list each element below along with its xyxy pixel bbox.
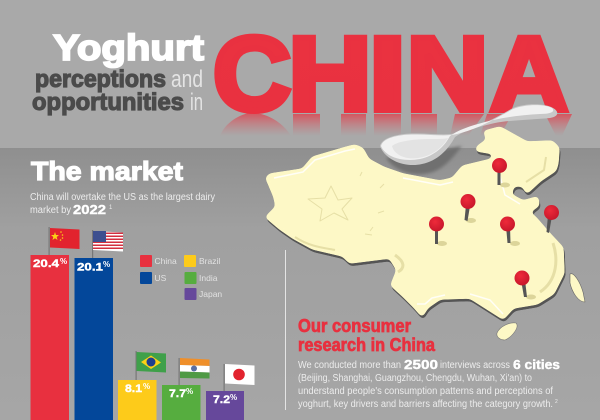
divider line <box>285 250 286 410</box>
research description text: yoghurt, key drivers and barriers affecting the category growth. <box>298 399 553 410</box>
background floor <box>0 148 600 420</box>
flag: US <box>92 230 123 258</box>
legend item: US: US <box>154 273 167 283</box>
intro text: China will overtake the US as the largest dairy <box>30 192 215 203</box>
heading: CHINA <box>213 15 568 133</box>
bar: China 20.4%: % <box>60 257 67 266</box>
bar: China 20.4% <box>30 255 69 420</box>
bar: Brazil 8.1%: % <box>143 382 150 391</box>
bar: US 20.1%: % <box>103 260 110 269</box>
map shadow <box>268 130 564 320</box>
legend item: India: India <box>199 273 218 283</box>
title: Yoghurt perceptions and opportunities in: perceptions <box>35 66 166 93</box>
reflection of CHINA lettering <box>220 113 572 136</box>
bar: India 7.7%: % <box>186 387 193 396</box>
heading: Our consumer research in China: research in China <box>298 335 436 355</box>
bar: India 7.7% <box>162 385 200 420</box>
research description text: 2 <box>555 399 558 405</box>
map embossed details <box>295 157 556 292</box>
flag: India <box>178 358 210 385</box>
intro text: 2022 <box>73 202 106 217</box>
heading: Our consumer research in China <box>298 316 436 355</box>
flag: China <box>48 227 80 255</box>
map highlights <box>274 149 520 314</box>
research description text <box>298 357 560 410</box>
title: Yoghurt perceptions and opportunities in: Yoghurt <box>53 27 204 68</box>
bar: Japan 7.2% <box>206 391 244 420</box>
spoon shadow <box>386 146 462 174</box>
map land <box>267 128 563 318</box>
map pins <box>429 158 559 300</box>
flag: Brazil <box>136 351 166 380</box>
title: Yoghurt perceptions and opportunities in <box>32 27 204 116</box>
heading: CHINA: I <box>369 15 406 132</box>
flag: Japan <box>224 364 254 391</box>
title: Yoghurt perceptions and opportunities in: in <box>190 89 203 116</box>
island: Taiwan <box>570 274 585 302</box>
legend item: Japan: Japan <box>199 289 222 299</box>
bar: Brazil 8.1%: 8.1 <box>125 383 142 395</box>
pin: Shanghai <box>544 205 559 233</box>
bar: China 20.4%: 20.4 <box>33 258 60 270</box>
pin: Chengdu <box>429 216 447 246</box>
pin: Wuhan <box>500 216 520 246</box>
title: Yoghurt perceptions and opportunities in: opportunities <box>32 89 184 116</box>
spoon <box>380 104 557 174</box>
heading: The market: The market <box>31 156 183 186</box>
heading: CHINA: C <box>213 15 291 133</box>
pin: Beijing <box>492 158 510 188</box>
map of China <box>267 128 585 340</box>
intro text: market by <box>30 205 71 216</box>
background wall <box>0 0 600 148</box>
heading: CHINA: A <box>490 15 568 133</box>
heading: CHINA: N <box>407 16 488 133</box>
bar: US 20.1%: 20.1 <box>77 262 103 274</box>
legend <box>140 255 222 300</box>
research description text: (Beijing, Shanghai, Guangzhou, Chengdu, Wuhan, Xi'an) to <box>298 373 532 384</box>
research description text: We conducted more than <box>298 360 401 371</box>
pin: Xi'an <box>460 194 476 223</box>
spoon body <box>380 104 557 165</box>
research description text: 6 cities <box>513 357 560 372</box>
island: Hainan <box>497 323 517 340</box>
bar: US 20.1% <box>74 258 113 420</box>
spoon rim and handle highlight <box>381 105 553 160</box>
bar: India 7.7%: 7.7 <box>169 388 186 400</box>
intro text: 1 <box>109 205 113 211</box>
heading: CHINA: H <box>288 16 372 133</box>
bar: Japan 7.2%: % <box>230 393 237 402</box>
heading: Our consumer research in China: Our consumer <box>298 316 411 336</box>
spoon bowl <box>392 138 448 158</box>
research description text: understand people's consumption patterns and perceptions of <box>298 386 553 397</box>
title: Yoghurt perceptions and opportunities in: and <box>171 66 203 93</box>
legend item: China: China <box>154 256 177 266</box>
bar chart: dairy market share <box>30 255 244 420</box>
research description text: 2500 <box>404 357 438 372</box>
research description text: interviews across <box>440 360 510 371</box>
bar: Brazil 8.1% <box>118 380 156 420</box>
pin: Guangzhou <box>514 270 536 300</box>
bar: Japan 7.2%: 7.2 <box>213 394 230 406</box>
legend item: Brazil: Brazil <box>199 256 220 266</box>
intro text <box>30 192 215 217</box>
